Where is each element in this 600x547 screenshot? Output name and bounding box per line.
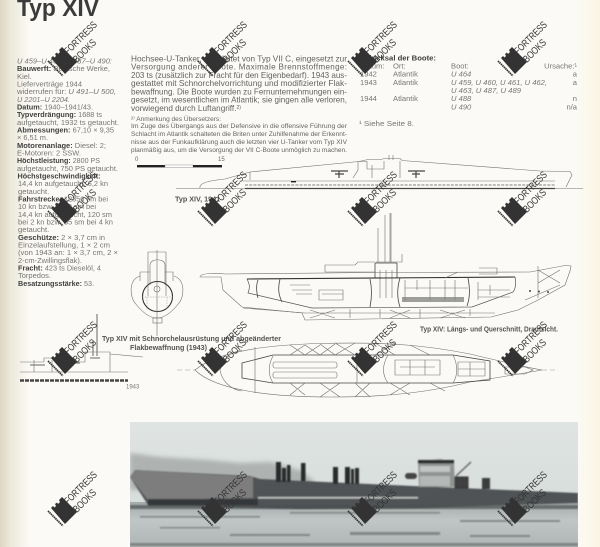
text block: technical data: Höchstgeschwindigkeit:	[18, 172, 100, 180]
text block: technical data: Lieferverträge 1944	[17, 80, 82, 88]
watermark row 2 column 2: FORTRESS	[212, 169, 250, 207]
scale bar: 0	[135, 157, 139, 163]
text block: technical data: Fahrstrecke: 12350 sm bei	[18, 194, 108, 204]
text block: description: gesetzt, im wesentlichen im Atlantik; sie gingen alle verloren,	[131, 96, 347, 105]
text block: technical data: 14,4 kn aufgetaucht, 120 sm	[18, 210, 112, 219]
watermark row 3 column 3: FORTRESS	[362, 319, 400, 357]
text block: description: 2)	[236, 105, 241, 111]
text block: translator's note: planmäßig aus, um die Versorgung der VII C-Boote unmöglich zu machen.	[131, 147, 347, 154]
text block: description: Versorgung anderer Boote. Maximale Brennstoffmenge:	[131, 63, 347, 72]
watermark row 4 column 1: BOOKS	[71, 487, 99, 515]
watermark row 4 column 3: FORTRESS	[362, 469, 400, 507]
watermark row 1 column 4: BOOKS	[521, 37, 549, 65]
text block: description: 203 ts (zusätzlich zur Fracht für den Eigenbedarf). 1943 aus-	[131, 71, 347, 80]
watermark row 4 column 1: FORTRESS	[62, 469, 100, 507]
watermark row 2 column 1: BOOKS	[71, 187, 99, 215]
text block: translator's note: ²⁾ Anmerkung des Übersetzers:	[131, 115, 221, 123]
table: fate of the boats: a	[573, 78, 578, 87]
table: fate of the boats: U 459, U 460, U 461, U 462,	[451, 78, 547, 87]
text block: technical data: Fracht: 423 ts Dieselöl, 4	[18, 264, 101, 272]
watermark row 2 column 3	[348, 169, 400, 226]
text block: technical data: Kiel.	[17, 72, 32, 81]
text block: translator's note: Im Zuge des Übergangs aus der Defensive in die offensive Führung der	[131, 122, 347, 130]
watermark row 2 column 2: BOOKS	[221, 187, 249, 215]
table: fate of the boats: Atlantik	[393, 78, 418, 87]
caption: longitudinal and cross section, plan view: Typ XIV: Längs- und Querschnitt, Draufsicht.	[420, 324, 558, 334]
table: fate of the boats: n/a	[566, 102, 578, 112]
watermark row 1 column 2: FORTRESS	[212, 19, 250, 57]
watermark row 1 column 3: BOOKS	[371, 37, 399, 65]
watermark row 2 column 3: BOOKS	[371, 187, 399, 215]
watermark row 4 column 2: FORTRESS	[212, 469, 250, 507]
text block: technical data: 2-cm-Zwillingsflak).	[18, 256, 82, 265]
text block: technical data: E-Motoren: 2 SSW.	[17, 148, 81, 158]
text block: technical data: Höchstleistung: 2800 PS	[17, 156, 100, 165]
watermark row 2 column 2	[198, 169, 250, 226]
watermark row 3 column 4	[498, 319, 550, 376]
watermark row 1 column 3	[348, 19, 400, 76]
watermark row 3 column 4: FORTRESS	[512, 319, 550, 357]
caption: snorkel version: Flakbewaffnung (1943)	[130, 343, 208, 352]
watermark row 3 column 2	[198, 319, 250, 376]
watermark row 4 column 4: FORTRESS	[512, 469, 550, 507]
watermark row 2 column 3: FORTRESS	[362, 169, 400, 207]
watermark row 4 column 3: BOOKS	[371, 487, 399, 515]
watermark row 3 column 3: BOOKS	[371, 337, 399, 365]
watermark row 2 column 4	[498, 169, 550, 226]
table: fate of the boats: Datum:	[360, 62, 384, 70]
watermark row 3 column 2: BOOKS	[221, 337, 249, 365]
watermark row 4 column 2	[198, 469, 250, 526]
caption: snorkel version	[102, 334, 281, 352]
text block: technical data: U 2201–U 2204.	[17, 95, 70, 104]
watermark row 4 column 4: BOOKS	[521, 487, 549, 515]
caption: Typ XIV 1941: Typ XIV, 1941	[175, 194, 220, 204]
table: fate of the boats: 1942	[360, 70, 377, 78]
table: fate of the boats: Atlantik	[393, 94, 418, 103]
table: fate of the boats: ¹ Siehe Seite 8.	[359, 119, 414, 128]
text block: technical data: (von 1943 an: 1 × 3,7 cm, 2 ×	[18, 248, 118, 257]
text block: translator's note	[131, 115, 348, 154]
text block: technical data: aufgetaucht, 750 PS getaucht.	[17, 164, 118, 173]
table: fate of the boats: Atlantik	[393, 70, 418, 78]
watermark row 3 column 2: FORTRESS	[212, 319, 250, 357]
watermark row 1 column 3: FORTRESS	[362, 19, 400, 57]
watermark row 3 column 1	[48, 319, 100, 376]
text block: technical data	[16, 56, 119, 288]
watermark row 1 column 4	[498, 19, 550, 76]
table: fate of the boats: Schicksal der Boote:	[360, 54, 436, 62]
table: fate of the boats: a	[573, 70, 578, 78]
table: fate of the boats: U 464	[451, 70, 471, 78]
text block: technical data: U 459–U 464, U 487–U 490:	[17, 56, 112, 66]
table: fate of the boats: Ort:	[393, 62, 406, 70]
text block: translator's note: Schlacht im Atlantik schalteten die Briten unter Zuhilfenahme der Erkennt-	[131, 131, 347, 138]
table: fate of the boats: U 463, U 487, U 489	[451, 86, 522, 95]
watermark row 2 column 4: BOOKS	[521, 187, 549, 215]
text block: technical data: bei 2 kn bzw. 55 sm bei 4 kn	[18, 218, 113, 226]
text block: description	[131, 54, 347, 113]
text block: technical data: Torpedos.	[18, 271, 51, 280]
scale bar: 15	[218, 157, 225, 163]
text block: technical data: aufgetaucht, 1932 ts getaucht.	[17, 118, 119, 127]
text block: technical data: Datum: 1940–1941/43.	[17, 102, 93, 112]
watermark row 4 column 1	[48, 469, 100, 526]
watermark row 4 column 4	[498, 469, 550, 526]
watermark row 2 column 1	[48, 169, 100, 226]
diagram: side view 1941	[176, 155, 583, 188]
watermark row 3 column 3	[348, 319, 400, 376]
table: fate of the boats: Boot:	[451, 62, 469, 70]
text block: technical data: × 6,51 m.	[17, 133, 48, 142]
text block: technical data: Typverdrängung: 1688 ts	[17, 110, 102, 119]
text block: technical data: Bauwerft: Deutsche Werke,	[17, 64, 110, 73]
watermark row 1 column 2	[198, 19, 250, 76]
watermark row 1 column 1: FORTRESS	[62, 19, 100, 57]
watermark row 3 column 1: FORTRESS	[62, 319, 100, 357]
text block: technical data: Abmessungen: 67,10 × 9,35	[17, 126, 114, 134]
table: fate of the boats	[359, 54, 578, 128]
watermark row 1 column 1: BOOKS	[71, 37, 99, 65]
watermark row 1 column 1	[48, 19, 100, 76]
text block: technical data: 14,4 kn aufgetaucht, 6,2 kn	[18, 179, 108, 188]
watermark row 3 column 4: BOOKS	[521, 337, 549, 365]
watermark row 1 column 4: FORTRESS	[512, 19, 550, 57]
watermark row 4 column 3	[348, 469, 400, 526]
watermark row 2 column 4: FORTRESS	[512, 169, 550, 207]
table: fate of the boats: U 488	[451, 94, 472, 103]
diagram: cross section	[131, 250, 183, 336]
text block: translator's note: nisse aus der Funkaufklärung auch die letzten vier U-Tanker vom Typ XIV	[131, 139, 348, 146]
diagram: plan view	[177, 343, 558, 397]
table: fate of the boats: Ursache:¹	[544, 62, 577, 70]
table: fate of the boats: 1943	[360, 78, 377, 87]
text block: description: gestattet mit Schnorchelvorrichtung und modifizierter Flak-	[131, 79, 347, 88]
watermark row 4 column 2: BOOKS	[221, 487, 249, 515]
diagram: longitudinal section	[200, 213, 571, 320]
text block: description: vorwiegend durch Luftangriff.	[131, 104, 235, 113]
watermark row 2 column 1: FORTRESS	[62, 169, 100, 207]
diagram: 1943 partial side view	[20, 314, 143, 380]
table: fate of the boats: n	[573, 94, 577, 103]
caption: snorkel version: Typ XIV mit Schnorchelausrüstung und abgeänderter	[102, 334, 281, 343]
text block: technical data: widerrufen für: U 491–U 500,	[16, 87, 116, 96]
photo: submarine at sea	[130, 422, 578, 547]
text block: description: Hochsee-U-Tanker, abgeleitet von Typ VII C, eingesetzt zur	[131, 54, 347, 64]
watermark row 3 column 1: BOOKS	[71, 337, 99, 365]
text block: technical data: Einzelaufstellung, 1 × 2 cm	[18, 240, 110, 250]
text block: description: bewaffnung. Die Boote wurden zu Fernunternehmungen ein-	[131, 87, 347, 96]
text block: technical data: Geschütze: 2 × 3,7 cm in	[18, 233, 105, 242]
text block: technical data: Besatzungsstärke: 53.	[18, 279, 94, 288]
label: 1943: 1943	[126, 384, 140, 390]
text block: technical data: Motorenanlage: Diesel: 2;	[17, 141, 106, 150]
text block: technical data: 10 kn bzw. 9300 sm bei	[18, 202, 96, 211]
watermark row 1 column 2: BOOKS	[221, 37, 249, 65]
table: fate of the boats: U 490	[451, 102, 472, 112]
table: fate of the boats: 1944	[360, 94, 377, 103]
scale bar	[135, 157, 225, 167]
text block: technical data: getaucht.	[18, 187, 49, 196]
text block: technical data: getaucht.	[18, 225, 49, 234]
